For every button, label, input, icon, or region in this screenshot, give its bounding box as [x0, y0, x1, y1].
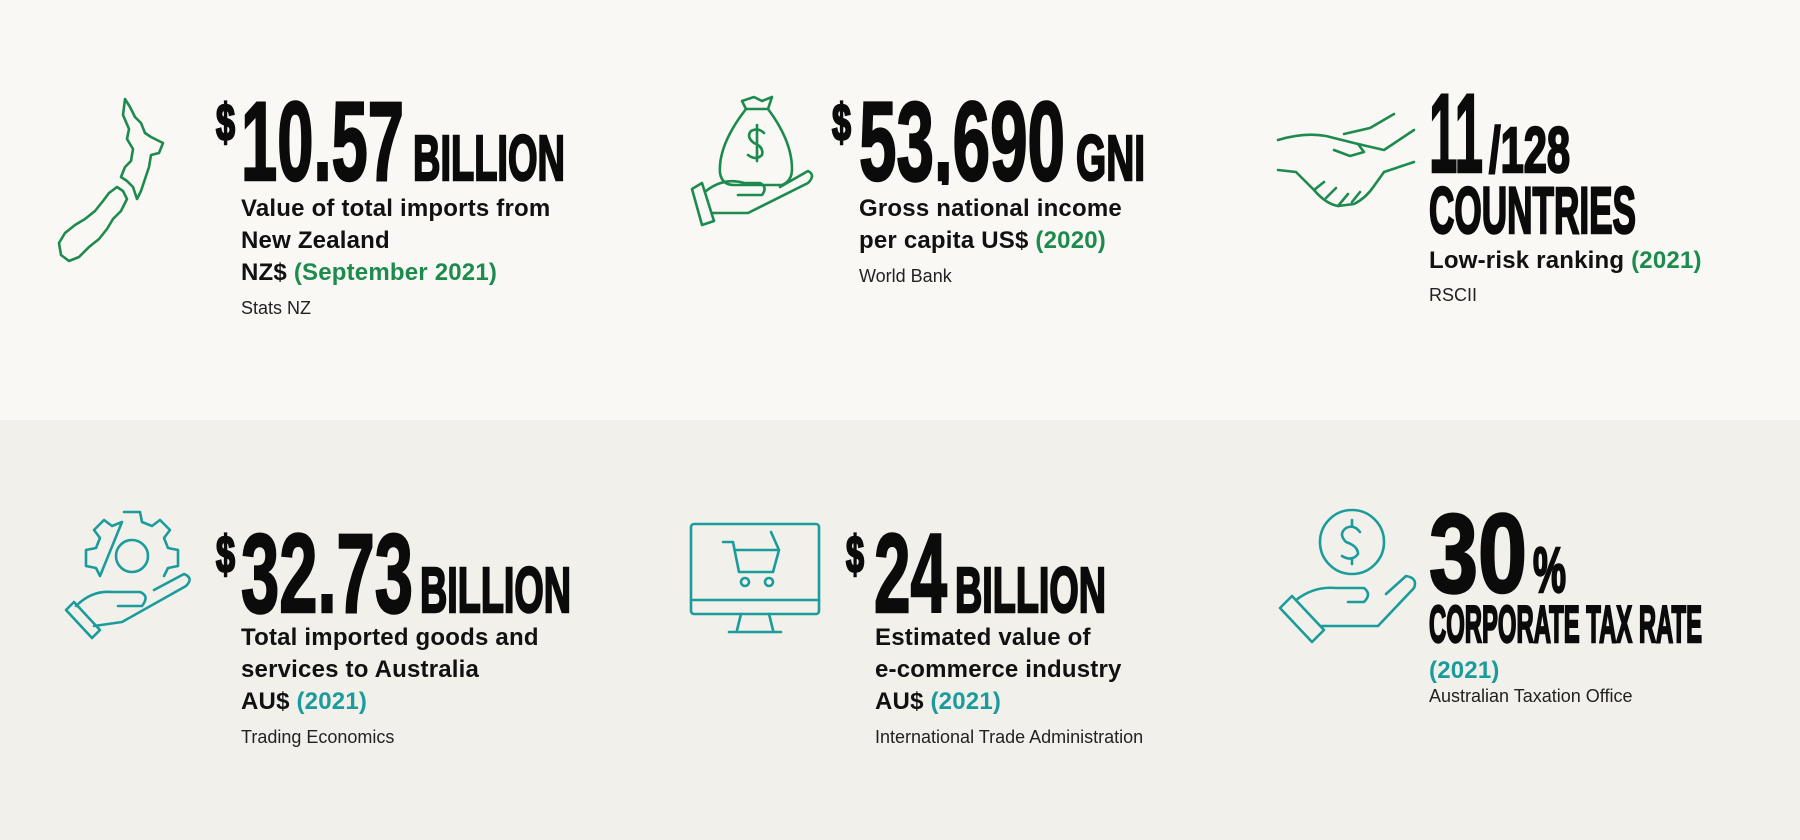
source: RSCII — [1429, 285, 1477, 305]
description: New Zealand — [241, 227, 390, 254]
stat: risk ranking — [1276, 92, 1702, 305]
source: World Bank — [859, 266, 952, 286]
big number: /128 — [1489, 114, 1570, 186]
description — [859, 195, 1122, 254]
description: (2021) — [1429, 657, 1500, 684]
stat: imported goods — [64, 510, 571, 747]
description: NZ$ (September 2021) — [241, 259, 497, 286]
big number — [846, 527, 1106, 617]
description: Low-risk ranking (2021) — [1429, 247, 1702, 274]
description — [241, 195, 550, 286]
big number — [1429, 92, 1636, 242]
icon: coin over hand — [1278, 508, 1416, 644]
description: per capita US$ (2020) — [859, 227, 1106, 254]
stat: imports from NZ — [58, 95, 565, 318]
icon: money bag in hand — [690, 96, 814, 226]
big number: $ — [216, 527, 235, 584]
description: AU$ (2021) — [241, 688, 367, 715]
description: AU$ (2021) — [875, 688, 1001, 715]
description: services to Australia — [241, 656, 479, 683]
description: Gross national income — [859, 195, 1122, 222]
icon: handshake — [1276, 112, 1416, 208]
source: International Trade Administration — [875, 727, 1143, 747]
big number: $ — [846, 527, 864, 584]
stat: corporate tax — [1278, 508, 1702, 706]
icon: computer with cart — [690, 522, 820, 634]
big number — [1429, 510, 1702, 650]
description: e-commerce industry — [875, 656, 1122, 683]
big number: $ — [216, 95, 235, 152]
source: Stats NZ — [241, 298, 311, 318]
stat: e-commerce — [690, 522, 1143, 747]
icon: gear in hand — [64, 510, 191, 640]
big number: $ — [832, 95, 851, 152]
stat: GNI — [690, 95, 1145, 286]
big number: % — [1533, 534, 1566, 606]
source: Australian Taxation Office — [1429, 686, 1632, 706]
icon: New Zealand map — [58, 98, 164, 262]
description: Total imported goods and — [241, 624, 539, 651]
description — [241, 624, 539, 715]
bottom band — [0, 420, 1800, 840]
source: Trading Economics — [241, 727, 394, 747]
top band — [0, 0, 1800, 420]
description — [875, 624, 1122, 715]
description: Value of total imports from — [241, 195, 550, 222]
description: Estimated value of — [875, 624, 1091, 651]
